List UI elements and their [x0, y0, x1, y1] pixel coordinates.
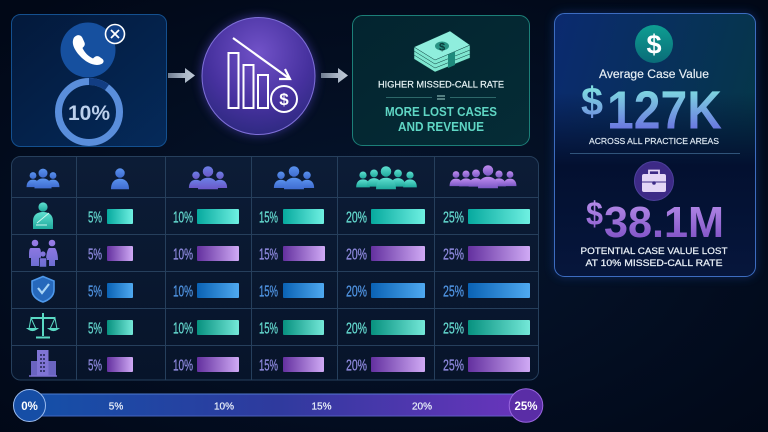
icon: stack of cash — [414, 31, 470, 72]
scale bar: 0 to 25 percent: 15% — [311, 402, 332, 412]
row: 5 to 25 percent green: 20% — [346, 320, 367, 338]
row: 5 to 25 percent violet: 10% — [173, 358, 193, 374]
row: 5 to 25 percent violet: 20% — [346, 358, 367, 374]
marker: 25 percent — [509, 389, 543, 422]
panel: lost revenue result — [352, 16, 530, 146]
marker: 25 percent: 25% — [514, 401, 538, 413]
icon: one person — [111, 168, 129, 189]
row: 5 to 25 percent green: 15% — [259, 320, 278, 338]
stat: 127K: $ — [581, 80, 603, 124]
scale bar: 0 to 25 percent: 10% — [214, 402, 234, 412]
icon: stack of cash: $ — [439, 42, 445, 54]
marker: 0 percent: 0% — [21, 401, 38, 413]
icon: scales of justice — [29, 313, 57, 338]
panel: missed call rate — [12, 14, 166, 146]
row: 5 to 25 percent blue: 20% — [346, 284, 367, 300]
row: 5 to 25 percent teal — [88, 209, 530, 226]
icon: dollar coin: $ — [646, 30, 662, 60]
row: 5 to 25 percent violet — [88, 357, 530, 374]
icon: three people large — [274, 166, 314, 189]
icon: office building — [29, 350, 57, 376]
text: more lost cases and revenue: AND REVENUE — [398, 120, 484, 134]
row: 5 to 25 percent blue: 25% — [443, 284, 464, 300]
row: 5 to 25 percent blue: 15% — [259, 284, 278, 300]
icon: declining revenue chart orb: $ — [279, 90, 289, 109]
row: 5 to 25 percent purple — [88, 246, 530, 264]
icon: six people — [450, 165, 516, 188]
row: 5 to 25 percent teal: 5% — [88, 210, 102, 226]
row: 5 to 25 percent violet: 15% — [259, 358, 278, 374]
panel: case value summary — [554, 13, 756, 277]
icon: family — [29, 240, 58, 267]
icon: declining revenue chart orb — [202, 17, 316, 135]
chart: 10 percent ring — [58, 81, 120, 142]
row: 5 to 25 percent purple: 10% — [173, 246, 193, 264]
row: 5 to 25 percent green: 10% — [173, 320, 193, 338]
row: 5 to 25 percent green — [88, 320, 530, 338]
row: 5 to 25 percent violet: 5% — [88, 358, 102, 374]
icon: shield — [32, 276, 54, 302]
chart: 10 percent ring: 10% — [68, 102, 110, 125]
scale bar: 0 to 25 percent: 5% — [109, 402, 123, 412]
row: 5 to 25 percent purple: 20% — [346, 246, 367, 264]
text: average case value: Average Case Value — [599, 69, 709, 81]
icon: dollar coin — [635, 25, 673, 63]
scale bar: 0 to 25 percent: 20% — [412, 402, 432, 412]
arrow: decline to result — [321, 68, 348, 83]
stat: 127K: 127K — [607, 80, 722, 140]
row: 5 to 25 percent purple: 15% — [259, 246, 278, 264]
scale bar: 0 to 25 percent — [14, 389, 543, 422]
panel: missed-call rate table — [12, 156, 538, 380]
text: higher missed-call rate: HIGHER MISSED-CALL RATE — [378, 80, 504, 90]
text: potential case value lost: POTENTIAL CASE VALUE LOST — [580, 246, 728, 257]
icon: five people — [356, 166, 417, 189]
equals divider — [386, 96, 496, 99]
text: more lost cases and revenue: MORE LOST CASES — [385, 105, 497, 119]
marker: 0 percent — [14, 390, 46, 422]
row: 5 to 25 percent purple: 5% — [88, 246, 102, 264]
icon: briefcase — [634, 162, 674, 200]
row: 5 to 25 percent blue: 10% — [173, 284, 193, 300]
text: more lost cases and revenue — [385, 105, 497, 134]
icon: three people — [189, 166, 227, 189]
row: 5 to 25 percent teal: 15% — [259, 210, 278, 226]
text: potential case value lost: AT 10% MISSED-CALL RATE — [586, 258, 722, 269]
text: potential case value lost — [580, 246, 728, 269]
icon: injured person — [33, 202, 53, 229]
row: 5 to 25 percent green: 5% — [88, 320, 102, 338]
stat: 38.1M: $ — [586, 195, 603, 232]
icon: phone with missed-call badge — [60, 22, 124, 78]
arrow: rate to decline — [168, 68, 195, 83]
stat: 38.1M: 38.1M — [604, 198, 724, 247]
row: 5 to 25 percent teal: 20% — [346, 210, 367, 226]
row: 5 to 25 percent teal: 10% — [173, 210, 193, 226]
text: across all practice areas: ACROSS ALL PRACTICE AREAS — [589, 136, 719, 146]
row: 5 to 25 percent blue: 5% — [88, 284, 102, 300]
icon: header group — [27, 169, 59, 188]
row: 5 to 25 percent violet: 25% — [443, 358, 464, 374]
row: 5 to 25 percent green: 25% — [443, 320, 464, 338]
row: 5 to 25 percent purple: 25% — [443, 246, 464, 264]
row: 5 to 25 percent teal: 25% — [443, 210, 464, 226]
row: 5 to 25 percent blue — [88, 283, 530, 300]
